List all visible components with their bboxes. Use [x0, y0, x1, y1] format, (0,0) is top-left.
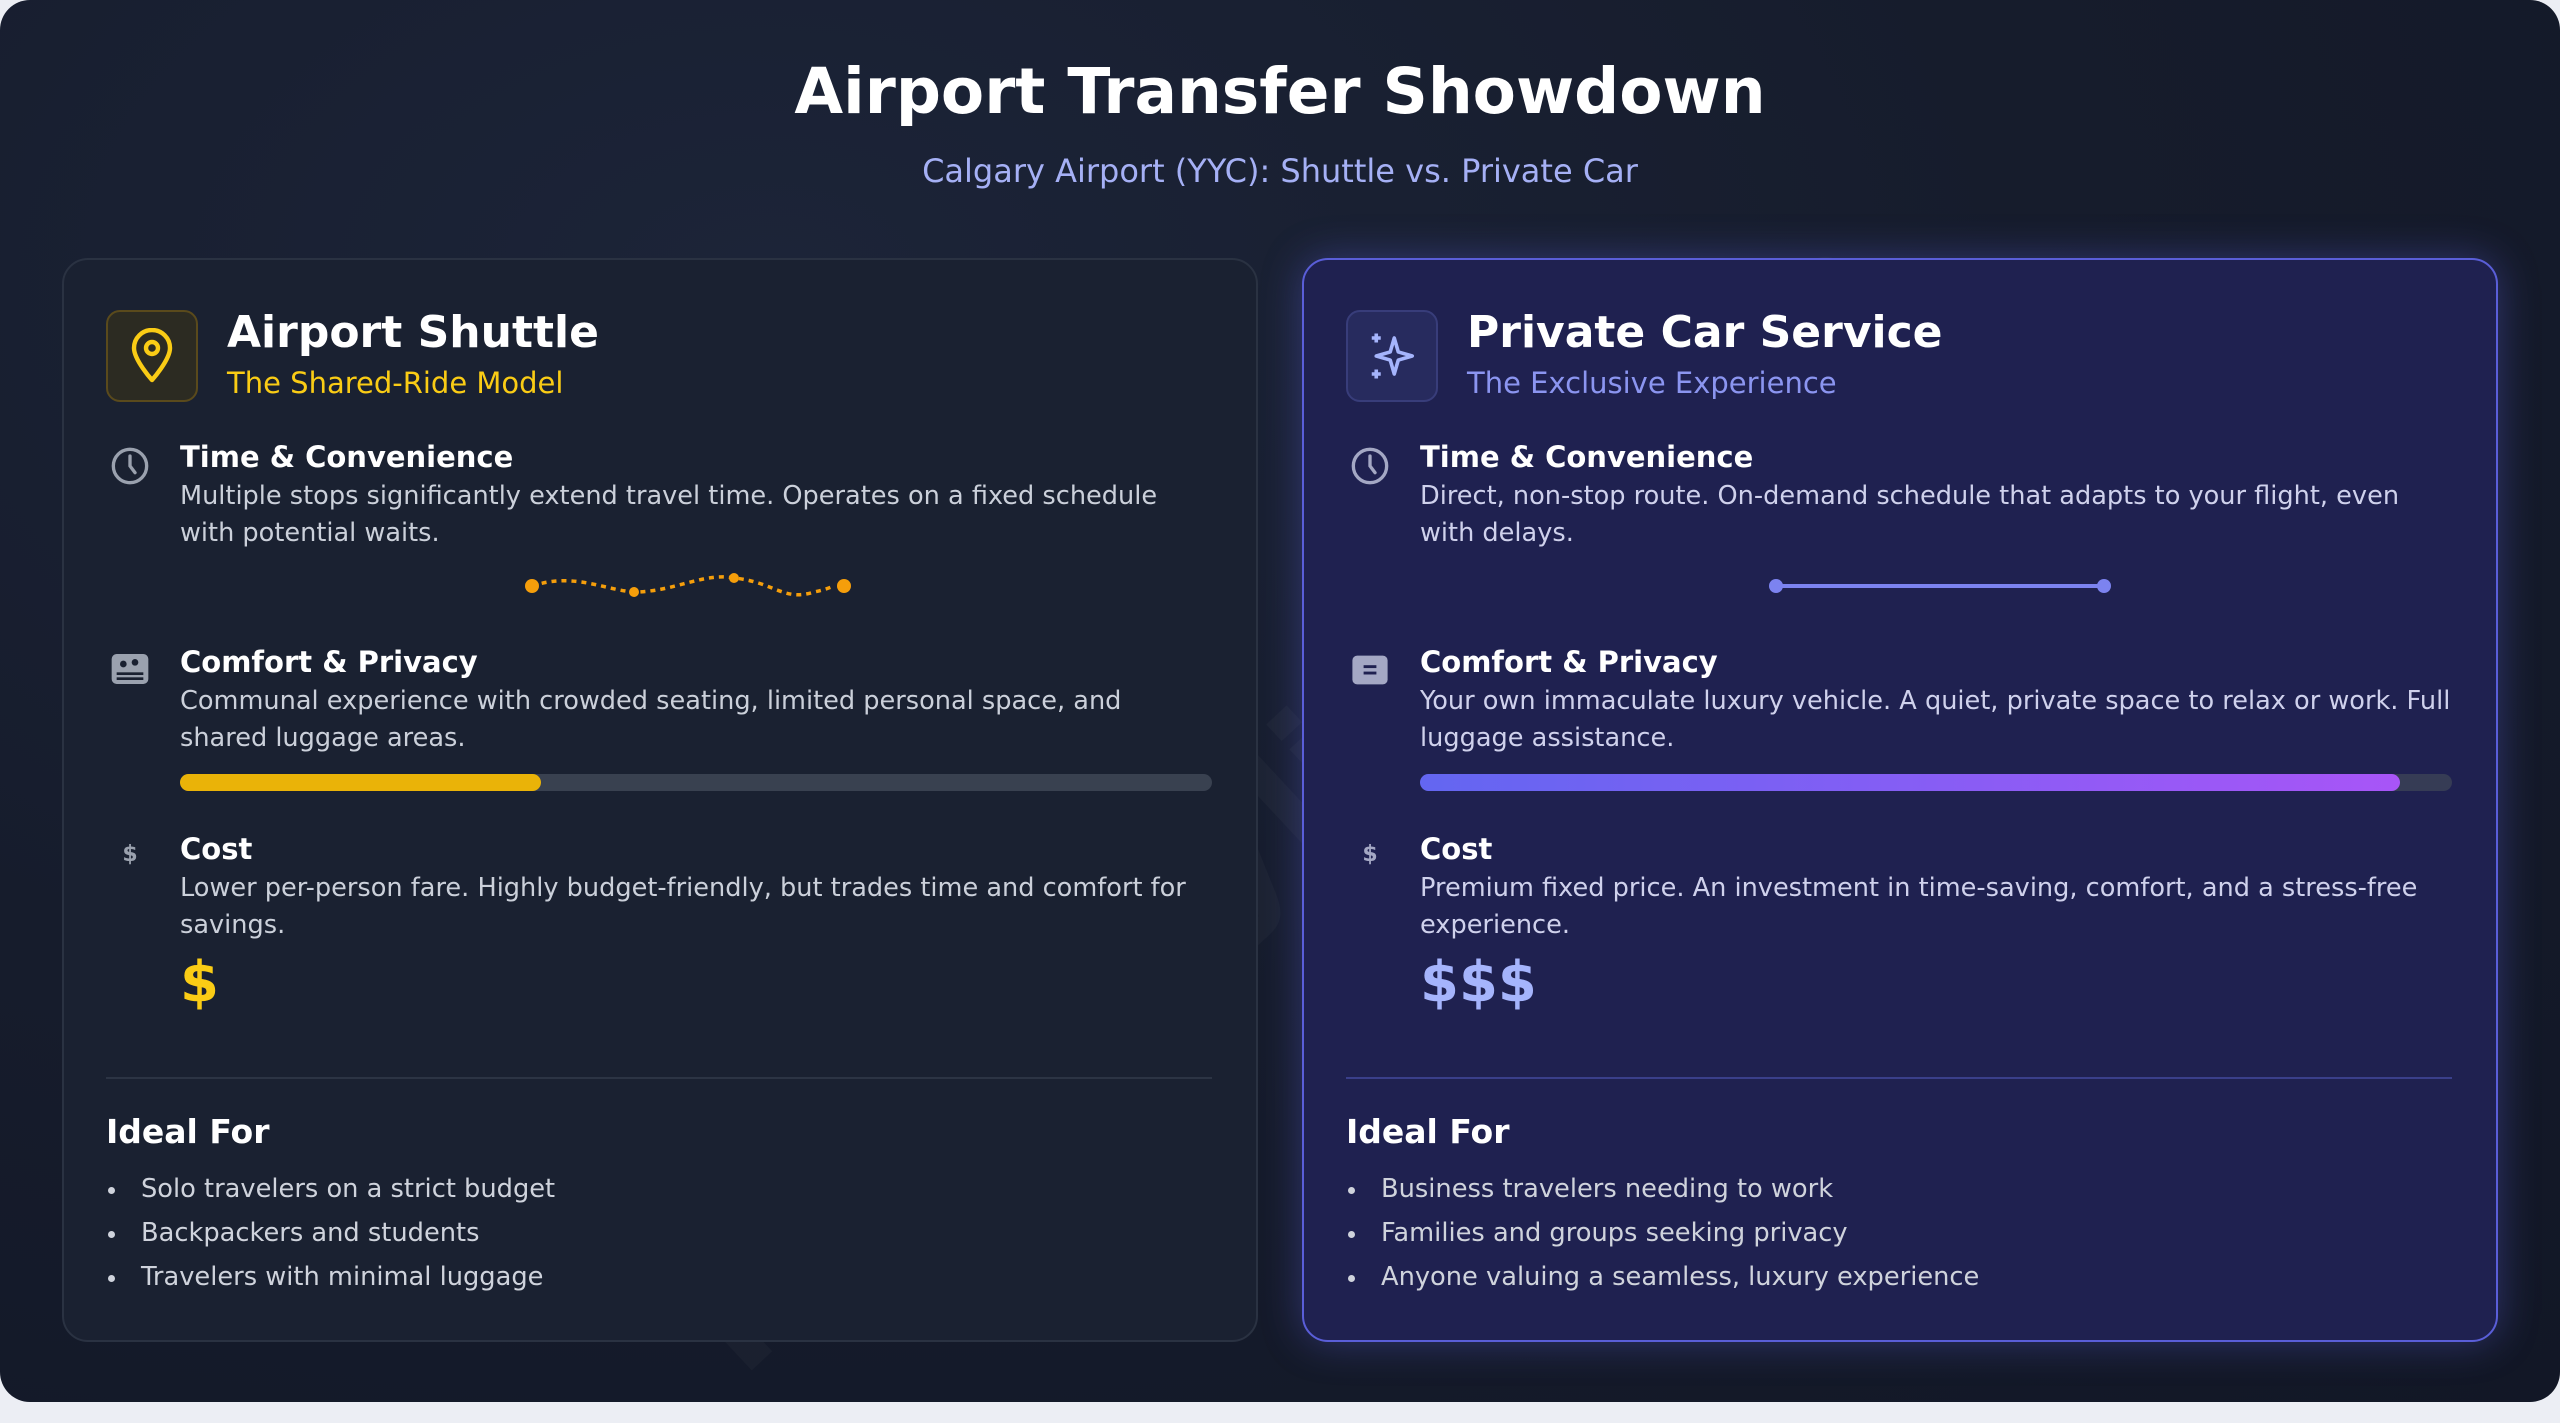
heading: time: Time & Convenience [180, 440, 513, 474]
text: comfort [180, 686, 1121, 753]
list: ideal for: Travelers with minimal luggage [141, 1262, 543, 1292]
icon: seats [112, 654, 148, 684]
text: time: Multiple stops significantly extend travel time. Operates on a fixed schedule [180, 481, 1157, 511]
icon: seat [1352, 656, 1388, 684]
heading: comfort: Comfort & Privacy [1420, 645, 1718, 679]
text: time [180, 481, 1157, 548]
list: ideal for: Solo travelers on a strict budget [141, 1174, 555, 1204]
panel title: Airport Shuttle [227, 307, 599, 358]
panel title: Private Car Service [1467, 307, 1943, 358]
panel: private car [1302, 258, 2498, 1342]
icon: dollar: $ [1362, 842, 1378, 867]
heading: cost: Cost [1420, 832, 1492, 866]
heading: time: Time & Convenience [1420, 440, 1753, 474]
icon: sparkle [1346, 310, 1438, 402]
text: comfort: shared luggage areas. [180, 723, 466, 753]
list: ideal for: Business travelers needing to work [1381, 1174, 1833, 1204]
text: cost: Lower per-person fare. Highly budget-friendly, but trades time and comfort for [180, 873, 1186, 903]
icon: clock [112, 448, 148, 484]
list: ideal for [1348, 1174, 1979, 1292]
list: ideal for [108, 1174, 555, 1292]
price indicator: $ [180, 950, 219, 1015]
comfort bar [1420, 774, 2452, 791]
text: time: Direct, non-stop route. On-demand schedule that adapts to your flight, even [1420, 481, 2399, 511]
text: cost [1420, 873, 2417, 940]
heading: ideal for: Ideal For [106, 1112, 270, 1151]
panel subtitle: The Exclusive Experience [1467, 366, 1837, 400]
icon: location pin [106, 310, 198, 402]
price indicator: $$$ [1420, 950, 1537, 1015]
subtitle: Calgary Airport (YYC): Shuttle vs. Private Car [922, 152, 1638, 190]
panel subtitle: The Shared-Ride Model [227, 366, 563, 400]
heading: cost: Cost [180, 832, 252, 866]
text: royalskylimo.com [640, 193, 1924, 1402]
text: time: with potential waits. [180, 518, 440, 548]
comfort bar [180, 774, 1212, 791]
text: cost: Premium fixed price. An investment in time-saving, comfort, and a stress-free [1420, 873, 2417, 903]
text: time [1420, 481, 2399, 548]
text: comfort [1420, 686, 2450, 753]
route: winding dotted [525, 573, 851, 597]
heading: comfort: Comfort & Privacy [180, 645, 478, 679]
heading: ideal for: Ideal For [1346, 1112, 1510, 1151]
icon: dollar: $ [122, 842, 138, 867]
text: cost: savings. [180, 910, 285, 940]
text: time: with delays. [1420, 518, 1574, 548]
route: straight line [1769, 579, 2111, 593]
list: ideal for: Anyone valuing a seamless, luxury experience [1381, 1262, 1979, 1292]
text: cost: experience. [1420, 910, 1570, 940]
text: comfort: Your own immaculate luxury vehicle. A quiet, private space to relax or work. Full [1420, 686, 2450, 716]
title: Airport Transfer Showdown [794, 55, 1766, 128]
list: ideal for: Backpackers and students [141, 1218, 479, 1248]
icon: clock [1352, 448, 1388, 484]
list: ideal for: Families and groups seeking privacy [1381, 1218, 1848, 1248]
text: cost [180, 873, 1186, 940]
text: comfort: Communal experience with crowded seating, limited personal space, and [180, 686, 1121, 716]
text: comfort: luggage assistance. [1420, 723, 1674, 753]
panel: airport shuttle [62, 258, 1258, 1342]
